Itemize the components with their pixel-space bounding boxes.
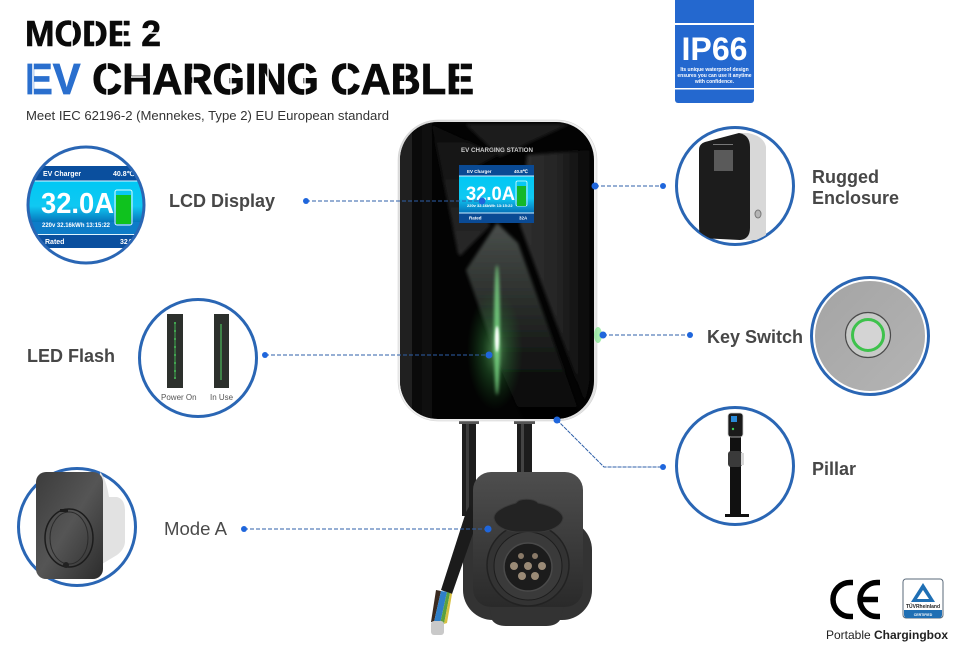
callout: LCD Display bbox=[169, 191, 486, 211]
circle: LCD detail: EV Charger bbox=[43, 171, 81, 178]
connector holder bbox=[431, 472, 592, 635]
callout: Rugged Enclosure: Enclosure bbox=[812, 188, 899, 208]
circle: LCD detail: 40.8℃ bbox=[113, 170, 135, 178]
main charger body bbox=[398, 120, 597, 421]
circle: LED Flash detail bbox=[140, 300, 256, 416]
LCD screen: Rated bbox=[469, 216, 482, 220]
callout: LED Flash: LED Flash bbox=[27, 346, 115, 366]
LCD screen: 32.0A bbox=[466, 184, 515, 205]
body heading: EV CHARGING STATION bbox=[461, 147, 533, 154]
caption: Portable Chargingbox: Portable Chargingbox bbox=[826, 628, 948, 642]
callout: Pillar: Pillar bbox=[812, 459, 856, 479]
badge: IP66 bbox=[675, 0, 754, 103]
badge: IP66: Its unique waterproof design bbox=[680, 67, 749, 73]
callout: Rugged Enclosure bbox=[592, 167, 899, 208]
LCD screen: 32A bbox=[519, 216, 528, 220]
callout: LED Flash bbox=[27, 346, 492, 366]
cables behind the connector bbox=[459, 420, 535, 516]
circle: LCD detail: Rated bbox=[45, 239, 64, 246]
callout: Mode A: Mode A bbox=[164, 519, 227, 539]
callout: Key Switch bbox=[600, 327, 803, 347]
circle: Pillar detail bbox=[676, 408, 794, 524]
logo: TUV Rheinland certified bbox=[903, 579, 943, 618]
callout: Key Switch: Key Switch bbox=[707, 327, 803, 347]
circle: LCD detail bbox=[27, 147, 146, 263]
callout: Pillar bbox=[554, 416, 856, 479]
badge: IP66: with confidence. bbox=[694, 79, 735, 85]
circle: LED Flash detail: In Use bbox=[210, 393, 234, 402]
title: EV CHARGING CABLE: EV CHARGING CABLE bbox=[25, 55, 474, 104]
badge: IP66: ensures you can use it anytime bbox=[677, 73, 752, 79]
socket bbox=[487, 524, 569, 606]
LCD screen bbox=[459, 165, 534, 223]
subtitle: Meet IEC 62196-2 (Mennekes, Type 2) EU European standard bbox=[26, 108, 389, 123]
LCD screen: EV Charger bbox=[467, 169, 492, 174]
circle: LCD detail: 32A bbox=[120, 239, 133, 246]
LCD screen: 40.8℃ bbox=[514, 168, 529, 174]
LED glow bbox=[467, 265, 523, 410]
callout: Rugged Enclosure: Rugged bbox=[812, 167, 879, 187]
circle: LCD detail: 220v 32.16kWh 13:15:22 bbox=[42, 222, 110, 229]
circle: LCD detail: 32.0A bbox=[41, 188, 114, 220]
flap bbox=[494, 499, 563, 532]
callout: LCD Display: LCD Display bbox=[169, 191, 275, 211]
logo: TUV Rheinland certified: CERTIFIED bbox=[914, 613, 933, 617]
badge: IP66: IP66 bbox=[682, 31, 748, 67]
title: MODE 2: MODE 2 bbox=[25, 13, 161, 54]
circle: LED Flash detail: Power On bbox=[161, 393, 197, 402]
logo: TUV Rheinland certified: TÜVRheinland bbox=[906, 603, 940, 610]
side key switch glow bbox=[594, 327, 602, 343]
logo: CE mark bbox=[833, 582, 880, 616]
callout: Mode A bbox=[164, 519, 492, 539]
loose cable with coloured wires bbox=[431, 505, 477, 635]
circle: Rugged Enclosure detail bbox=[676, 128, 794, 244]
circle: Mode A detail bbox=[18, 468, 136, 586]
circle: Key Switch detail bbox=[812, 278, 928, 394]
LCD screen: 220v 32.16kWh 13:15:22 bbox=[467, 203, 513, 208]
